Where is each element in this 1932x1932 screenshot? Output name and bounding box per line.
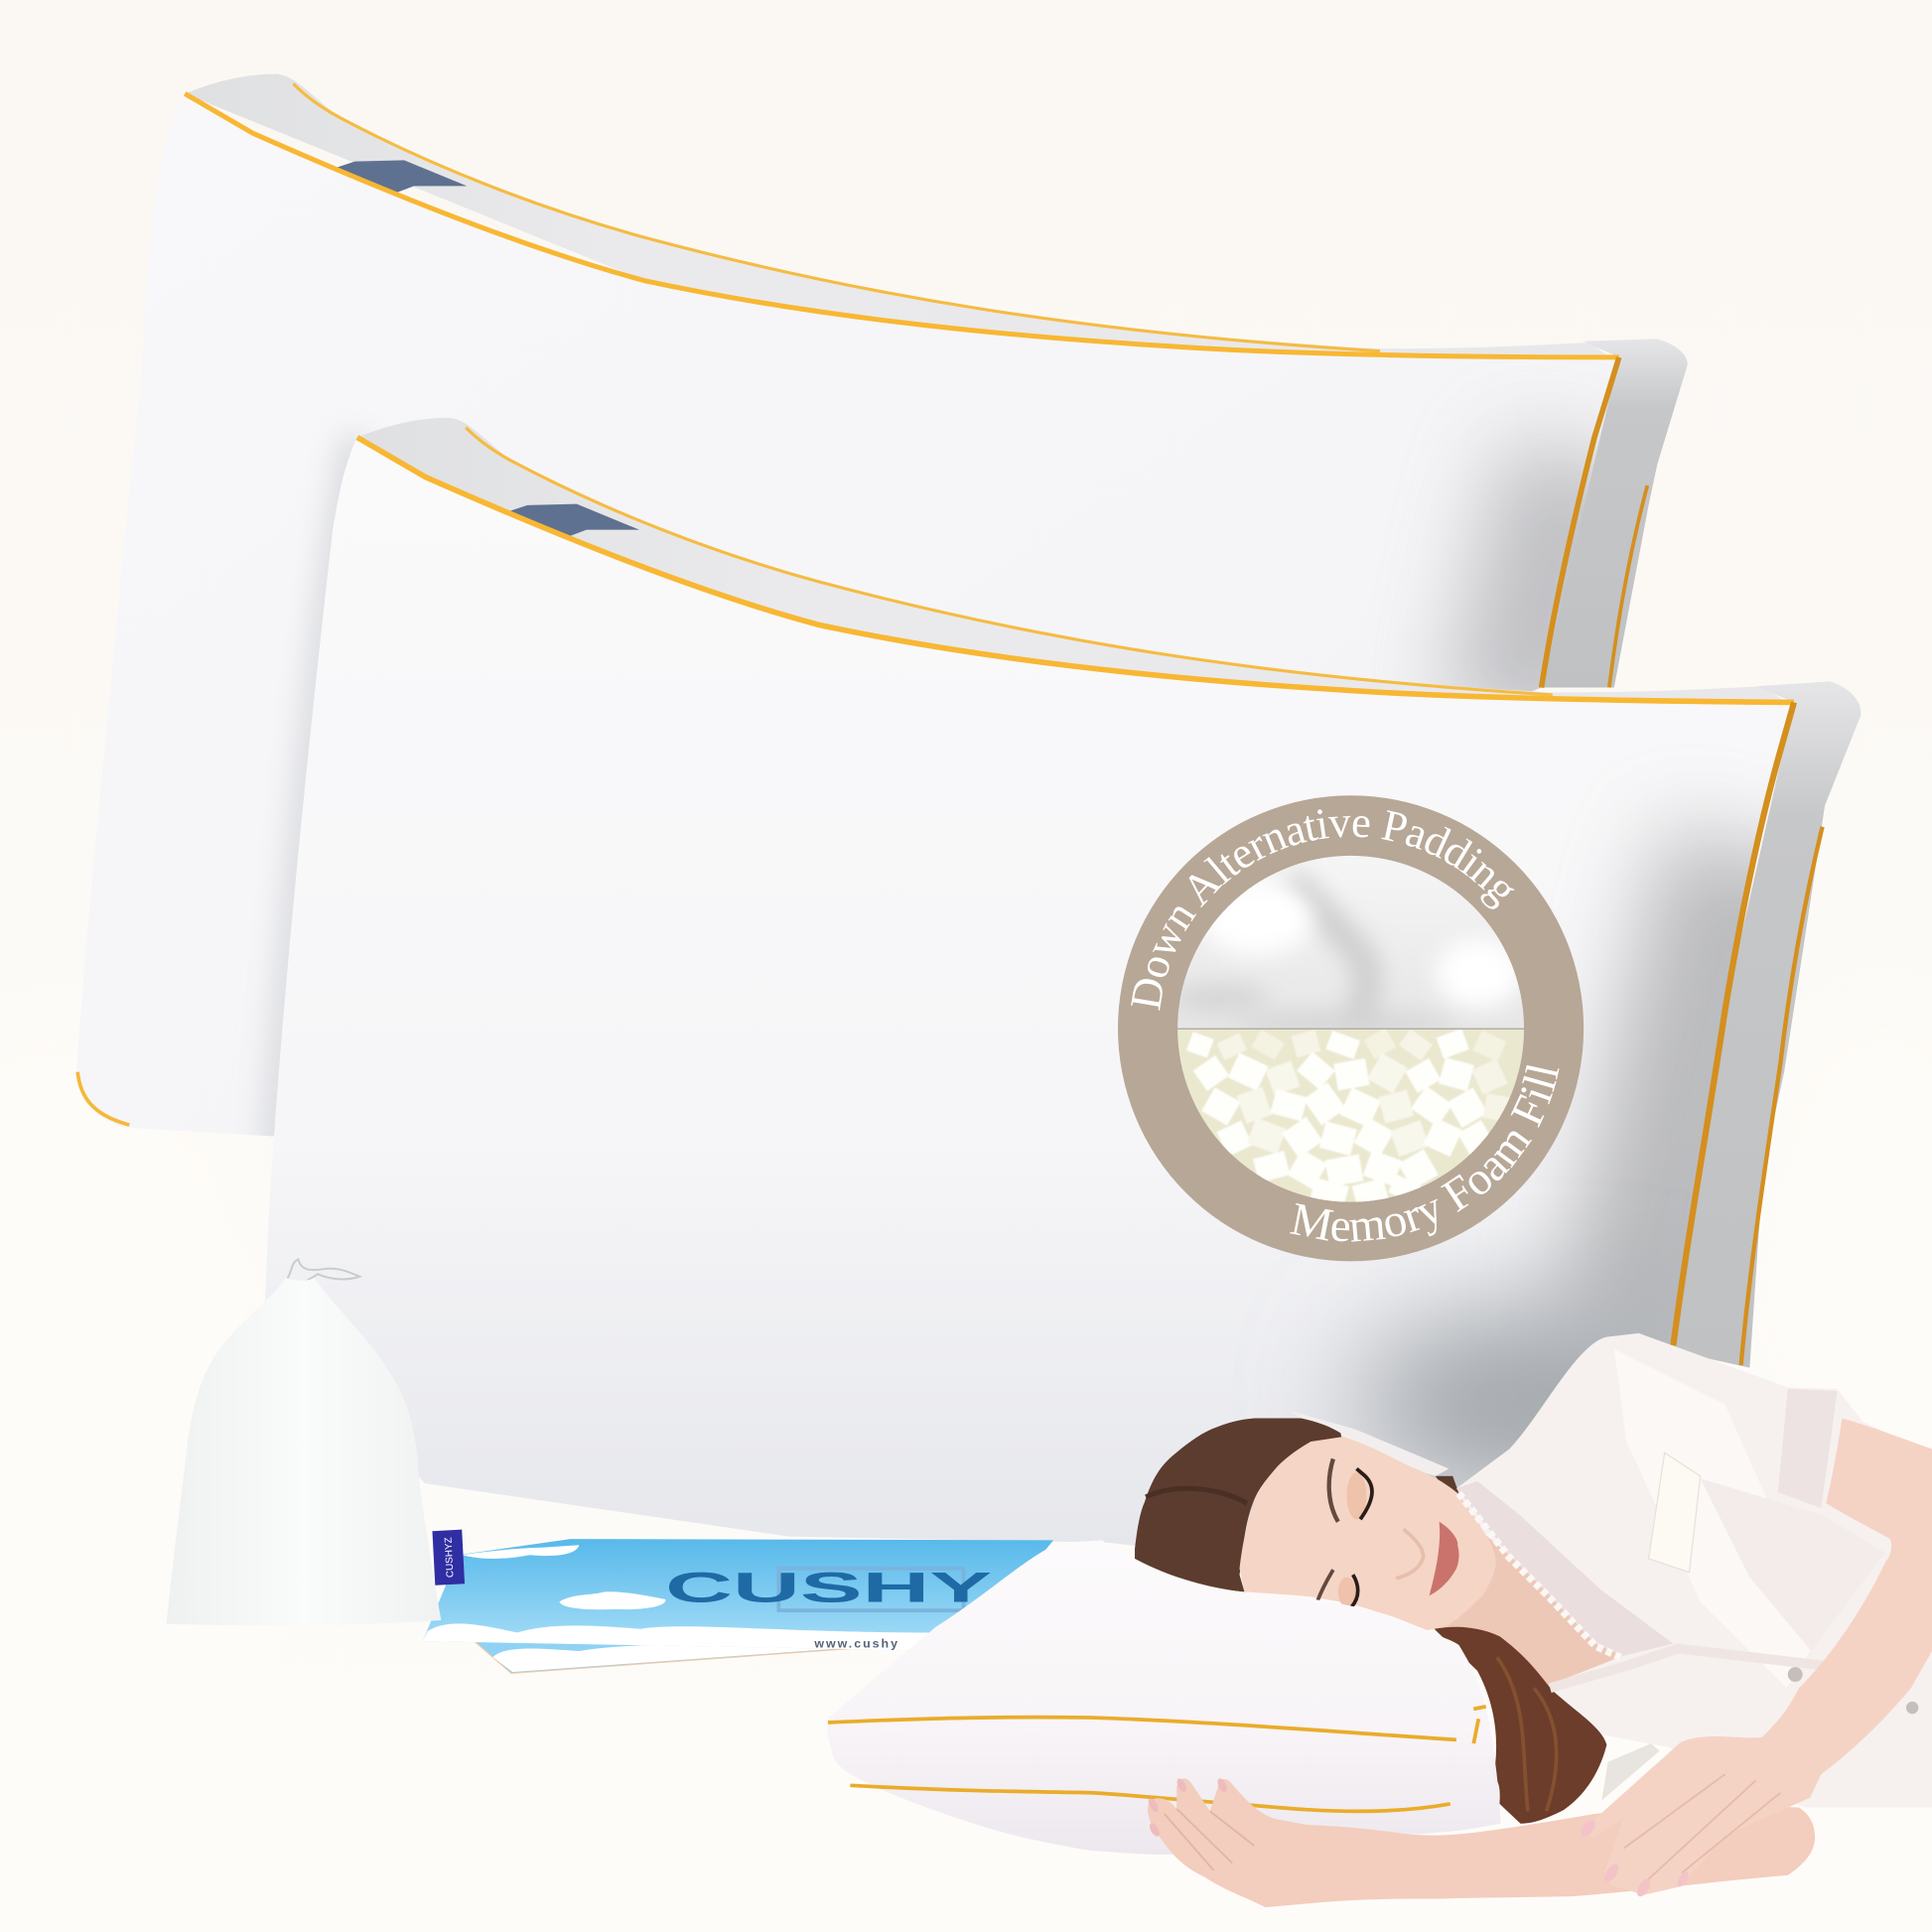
front pillow top gusset [357,418,1794,709]
back pillow face [76,93,1619,1141]
finger lines [1165,1809,1254,1870]
sleeve lace [1778,1389,1837,1508]
collar lace lower [1550,1649,1826,1688]
lower arm and hand [1147,1777,1815,1907]
back pillow shading [265,438,1578,1307]
bag body [167,1278,441,1625]
upper card [423,1539,1053,1651]
back pillow [75,73,1688,1136]
small cloud [559,1591,665,1609]
shirt shadow [1701,1478,1885,1651]
upper eyelid [1346,1472,1366,1519]
cards [423,1539,1053,1673]
hair strands [1497,1657,1557,1811]
arm and hand [1583,1418,1932,1895]
hair upper [1135,1418,1343,1591]
photo: down alternative padding [1171,850,1534,1033]
badge: fill materials [1118,795,1585,1261]
hair part shading [1146,1488,1247,1503]
back pillow right gusset [1534,339,1688,688]
lips [1430,1522,1459,1595]
front pillow gold piping top [357,438,1794,702]
back pillow tag [333,160,467,194]
front pillow tag [505,504,639,537]
shirt highlights [1614,1349,1849,1688]
hair behind head [1436,1476,1458,1493]
small pillow piping top [828,1718,1456,1739]
back pillow gold piping top [185,93,1619,357]
front pillow face [265,438,1794,1601]
photo: memory foam fill [1171,1028,1534,1208]
upper card clouds [423,1623,961,1651]
shirt pocket [1649,1452,1701,1573]
forearm and hand [1148,1778,1815,1907]
back pillow top gusset [185,73,1619,369]
neckline scallops [1458,1493,1622,1658]
front pillow right gusset [1666,681,1861,1368]
front pillow gold piping outer [1741,827,1823,1365]
back pillow gold piping right [1542,357,1619,688]
logo wordmark: CUSHY [665,1564,992,1610]
shirt [1456,1333,1932,1808]
finger lines [1624,1774,1780,1879]
other sleeve lace [1601,1743,1660,1800]
website address: www.cushy [813,1636,899,1650]
upper eyebrow [1329,1458,1338,1522]
nose shadow [1396,1529,1424,1579]
small pillow piping side [1473,1707,1486,1743]
neck [1443,1535,1622,1686]
bag label: CUSHYZ [443,1537,457,1578]
front pillow gold piping upper edge [466,428,1553,695]
hair lower [1435,1627,1606,1824]
badge ring [1118,795,1584,1261]
front pillow [265,418,1861,1601]
resting nails [1579,1818,1691,1898]
upper arm and hand [1579,1418,1932,1898]
lower eye lashes [1351,1575,1358,1606]
small pillow [827,1540,1501,1855]
holding nails [1147,1777,1229,1838]
back pillow lower left piping [77,1072,129,1125]
bag string [286,1259,359,1282]
face [1240,1437,1496,1630]
label: Memory Foam Fill: Memory Foam Fill [1290,1064,1559,1242]
upper eye lashes [1356,1468,1372,1519]
lower card [475,1632,850,1673]
photo divider [1177,1028,1524,1030]
back pillow gold piping upper edge [293,83,1380,351]
back pillow gold piping outer [1609,485,1647,688]
neckline lace [1456,1481,1673,1656]
lower eyelid [1338,1578,1355,1606]
label: Down Alternative Padding: Down Alternative Padding [1131,809,1515,1011]
logo frame [778,1569,964,1610]
front pillow shading [1355,850,1756,1503]
bag label [432,1530,465,1586]
drawstring bag [167,1259,465,1625]
front pillow gold piping right [1673,702,1794,1345]
small pillow piping bottom [850,1785,1450,1811]
back head pillow edge [1290,1411,1449,1476]
lower card clouds [492,1641,838,1672]
buttons [1788,1667,1918,1714]
woman sleeping on pillow [827,1333,1932,1907]
lower eyebrow [1317,1570,1333,1601]
top cloud [462,1545,579,1559]
